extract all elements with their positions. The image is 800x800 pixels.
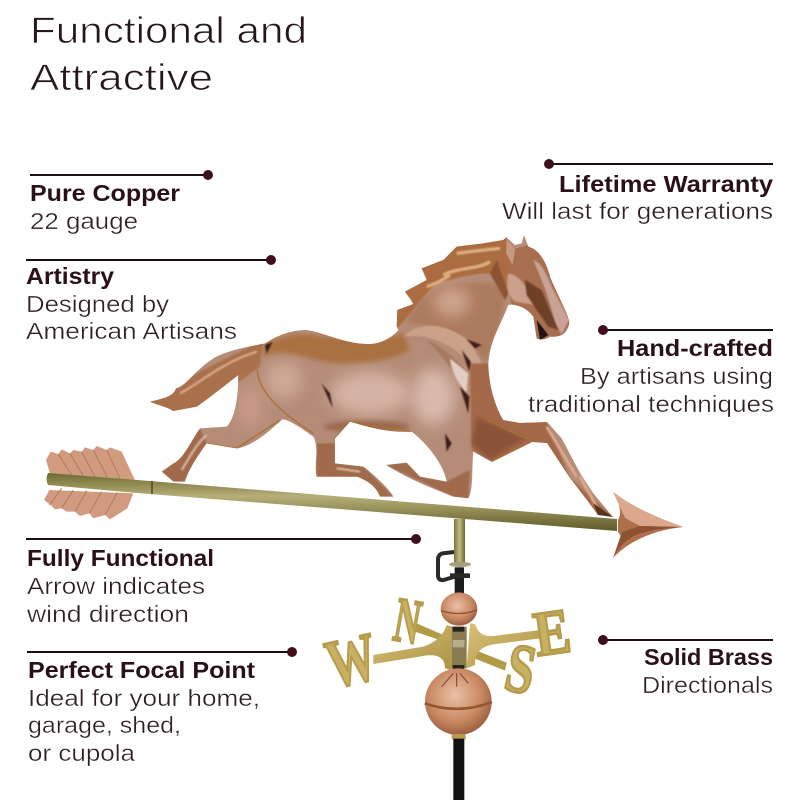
callout: perfect focal point: Perfect Focal Point bbox=[28, 657, 255, 683]
letter W: W bbox=[319, 618, 384, 703]
callout: lifetime warranty bbox=[502, 159, 773, 224]
callout: perfect focal point bbox=[27, 647, 297, 766]
callout: perfect focal point: Ideal for your home, bbox=[28, 685, 260, 711]
callout: perfect focal point: or cupola bbox=[28, 740, 135, 766]
callout: perfect focal point: garage, shed, bbox=[28, 712, 181, 738]
neck bbox=[407, 282, 507, 363]
callout: hand-crafted: By artisans using bbox=[580, 363, 773, 389]
callout: artistry: Designed by bbox=[26, 291, 170, 317]
shaft collar bbox=[151, 481, 153, 494]
arrow shaft bbox=[46, 473, 617, 531]
letter S arm bbox=[470, 649, 507, 671]
dark creases bbox=[265, 339, 482, 452]
letter N arm bbox=[415, 623, 443, 641]
title bbox=[30, 10, 307, 98]
arrow feathers bbox=[44, 446, 135, 519]
centre block bbox=[452, 627, 467, 671]
leg edges bbox=[207, 370, 537, 477]
callout: pure copper bbox=[30, 170, 213, 234]
G bracket bbox=[438, 552, 457, 580]
callout: fully functional bbox=[26, 534, 421, 627]
callout: lifetime warranty: Lifetime Warranty bbox=[559, 171, 773, 197]
mane bbox=[395, 237, 513, 330]
illustration: horse weathervane bbox=[44, 230, 683, 800]
callout: fully functional: wind direction bbox=[26, 601, 189, 627]
callout: hand-crafted: traditional techniques bbox=[528, 391, 774, 417]
brass stem bbox=[454, 519, 465, 564]
callout: solid brass bbox=[598, 635, 773, 698]
callout: lifetime warranty: Will last for generations bbox=[502, 198, 773, 224]
vertical support and compass bbox=[319, 519, 575, 800]
hind legs bbox=[162, 428, 470, 498]
chest and forearm bbox=[470, 363, 613, 517]
head bbox=[507, 245, 571, 340]
fitting bbox=[449, 562, 471, 593]
callout: fully functional: Arrow indicates bbox=[27, 573, 205, 599]
tail bbox=[150, 340, 263, 413]
letter E: E bbox=[529, 595, 575, 670]
back sheen bbox=[263, 333, 410, 363]
letter N: N bbox=[389, 585, 426, 659]
pole bbox=[453, 739, 464, 800]
callout: pure copper: Pure Copper bbox=[30, 180, 180, 206]
callout: hand-crafted bbox=[528, 325, 774, 417]
letter S: S bbox=[499, 629, 542, 710]
east arm bbox=[467, 623, 540, 668]
body highlights bbox=[330, 372, 410, 415]
callout: fully functional: Fully Functional bbox=[27, 545, 214, 571]
horse bbox=[147, 230, 620, 523]
west arm bbox=[373, 625, 452, 670]
shoulder straps bbox=[403, 326, 483, 367]
lower shading bbox=[323, 421, 410, 433]
callout: solid brass: Directionals bbox=[642, 672, 773, 698]
collar bbox=[452, 734, 466, 739]
arrow head bbox=[613, 492, 683, 558]
callout: hand-crafted: Hand-crafted bbox=[617, 335, 773, 361]
callout: artistry: American Artisans bbox=[26, 318, 237, 344]
callout: artistry bbox=[26, 255, 276, 344]
callout: pure copper: 22 gauge bbox=[30, 208, 138, 234]
callout: solid brass: Solid Brass bbox=[644, 644, 773, 670]
callout: artistry: Artistry bbox=[26, 263, 114, 289]
title: Attractive bbox=[30, 57, 213, 98]
bottom ball bbox=[425, 668, 492, 735]
title: Functional and bbox=[30, 10, 307, 51]
top ball bbox=[441, 592, 477, 626]
